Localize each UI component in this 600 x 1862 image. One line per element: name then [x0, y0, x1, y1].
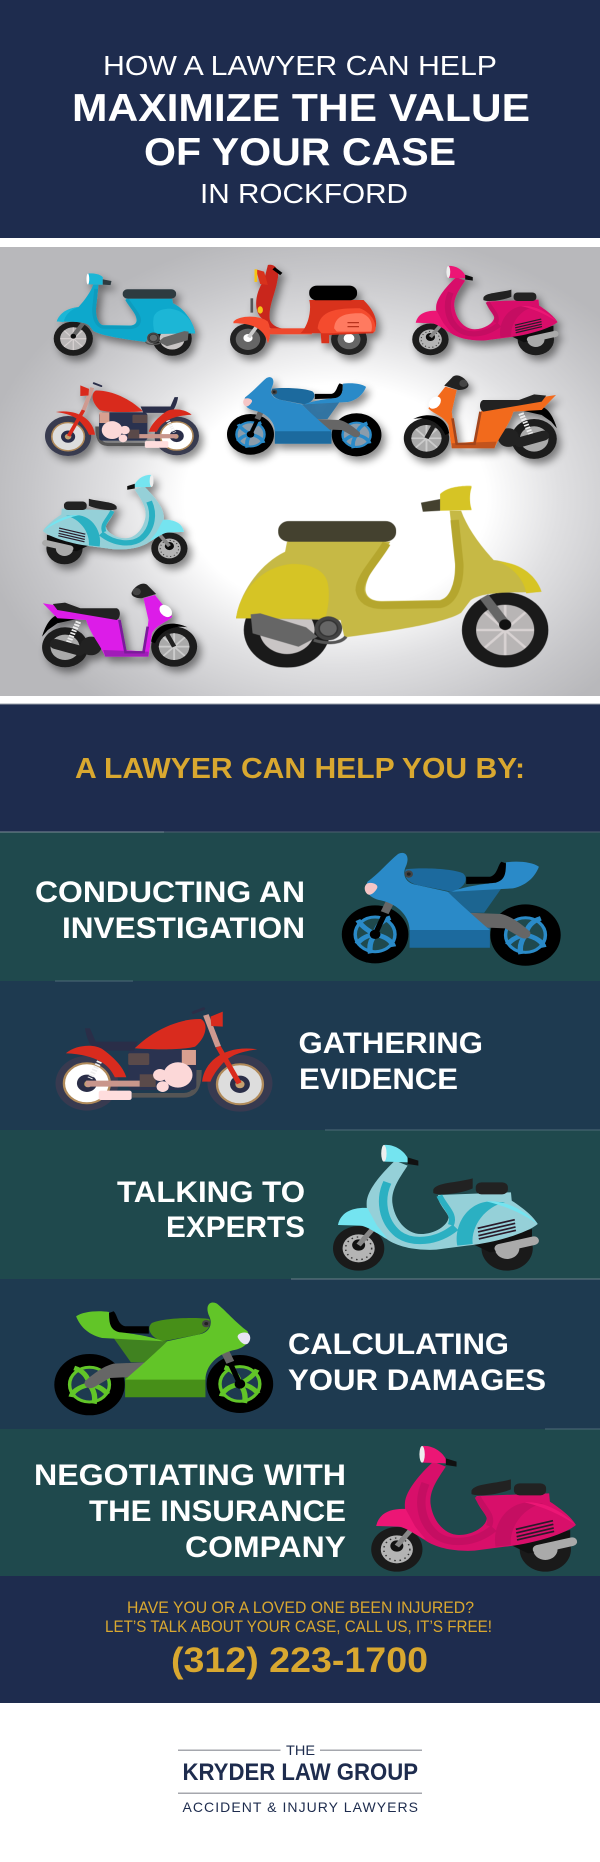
- text: conducting an investigation: [35, 876, 305, 945]
- panel: heading band: [0, 704, 600, 832]
- logo: the kryder law group: [178, 1742, 422, 1815]
- text: conducting an investigation: INVESTIGATION: [62, 912, 305, 945]
- icon: pink scooter: [371, 1446, 576, 1572]
- text: talking to experts: EXPERTS: [166, 1211, 305, 1244]
- icon: light blue scooter: [43, 475, 188, 564]
- heading: a lawyer can help you by: A LAWYER CAN HELP YOU BY:: [75, 753, 525, 785]
- header panel: [0, 0, 600, 238]
- icon: blue sport bike: [342, 853, 561, 966]
- icon: red cruiser motorcycle: [56, 1009, 272, 1112]
- icon: cyan scooter: [54, 273, 195, 356]
- icon: magenta moped: [42, 584, 197, 667]
- icon: green sport bike: [54, 1302, 273, 1415]
- logo: the kryder law group: KRYDER LAW GROUP: [182, 1759, 418, 1786]
- panel: conducting an investigation: [0, 832, 600, 981]
- text: calculating your damages: [288, 1328, 546, 1397]
- text: negotiating with the insurance company: THE INSURANCE: [89, 1495, 346, 1528]
- title line: of your case: OF YOUR CASE: [144, 131, 456, 174]
- text: gathering evidence: GATHERING: [298, 1027, 483, 1060]
- text: gathering evidence: [298, 1027, 483, 1096]
- icon: orange moped: [404, 375, 557, 459]
- text: talking to experts: TALKING TO: [117, 1176, 305, 1209]
- icon: light blue scooter: [333, 1145, 538, 1271]
- icon: large yellow scooter: [236, 486, 548, 668]
- text: have you been injured: HAVE YOU OR A LOVED ONE BEEN INJURED?: [127, 1599, 474, 1617]
- text: gathering evidence: EVIDENCE: [299, 1063, 458, 1096]
- text: conducting an investigation: CONDUCTING AN: [35, 876, 305, 909]
- text: talking to experts: [117, 1176, 305, 1244]
- title line: in rockford: IN ROCKFORD: [200, 178, 408, 209]
- panel: call to action: [0, 1576, 600, 1703]
- logo: the kryder law group: ACCIDENT & INJURY LAWYERS: [182, 1799, 418, 1815]
- text: negotiating with the insurance company: NEGOTIATING WITH: [34, 1459, 346, 1492]
- panel: talking to experts: [0, 1130, 600, 1279]
- icon: red scooter: [230, 265, 376, 355]
- icon: red cruiser motorcycle: [45, 383, 199, 456]
- vehicle grid with drop shadow: [42, 265, 558, 667]
- panel: gathering evidence: [0, 981, 600, 1130]
- panel: negotiating with the insurance company: [0, 1429, 600, 1576]
- text: negotiating with the insurance company: COMPANY: [185, 1531, 346, 1564]
- text: calculating your damages: CALCULATING: [288, 1328, 509, 1361]
- panel: calculating your damages: [0, 1279, 600, 1429]
- text: negotiating with the insurance company: [34, 1459, 346, 1564]
- title line: how a lawyer can help: HOW A LAWYER CAN HELP: [103, 50, 497, 81]
- text: calculating your damages: YOUR DAMAGES: [288, 1364, 546, 1397]
- title line: maximize the value: MAXIMIZE THE VALUE: [72, 87, 530, 130]
- icon: blue sport bike: [227, 377, 381, 456]
- phone number: (312) 223-1700: [171, 1641, 428, 1680]
- panel: motorcycle collection image: [0, 247, 600, 696]
- icon: pink scooter: [412, 266, 558, 355]
- logo: the kryder law group: THE: [286, 1742, 315, 1758]
- text: let's talk about your case: LET’S TALK ABOUT YOUR CASE, CALL US, IT’S FREE!: [105, 1618, 492, 1636]
